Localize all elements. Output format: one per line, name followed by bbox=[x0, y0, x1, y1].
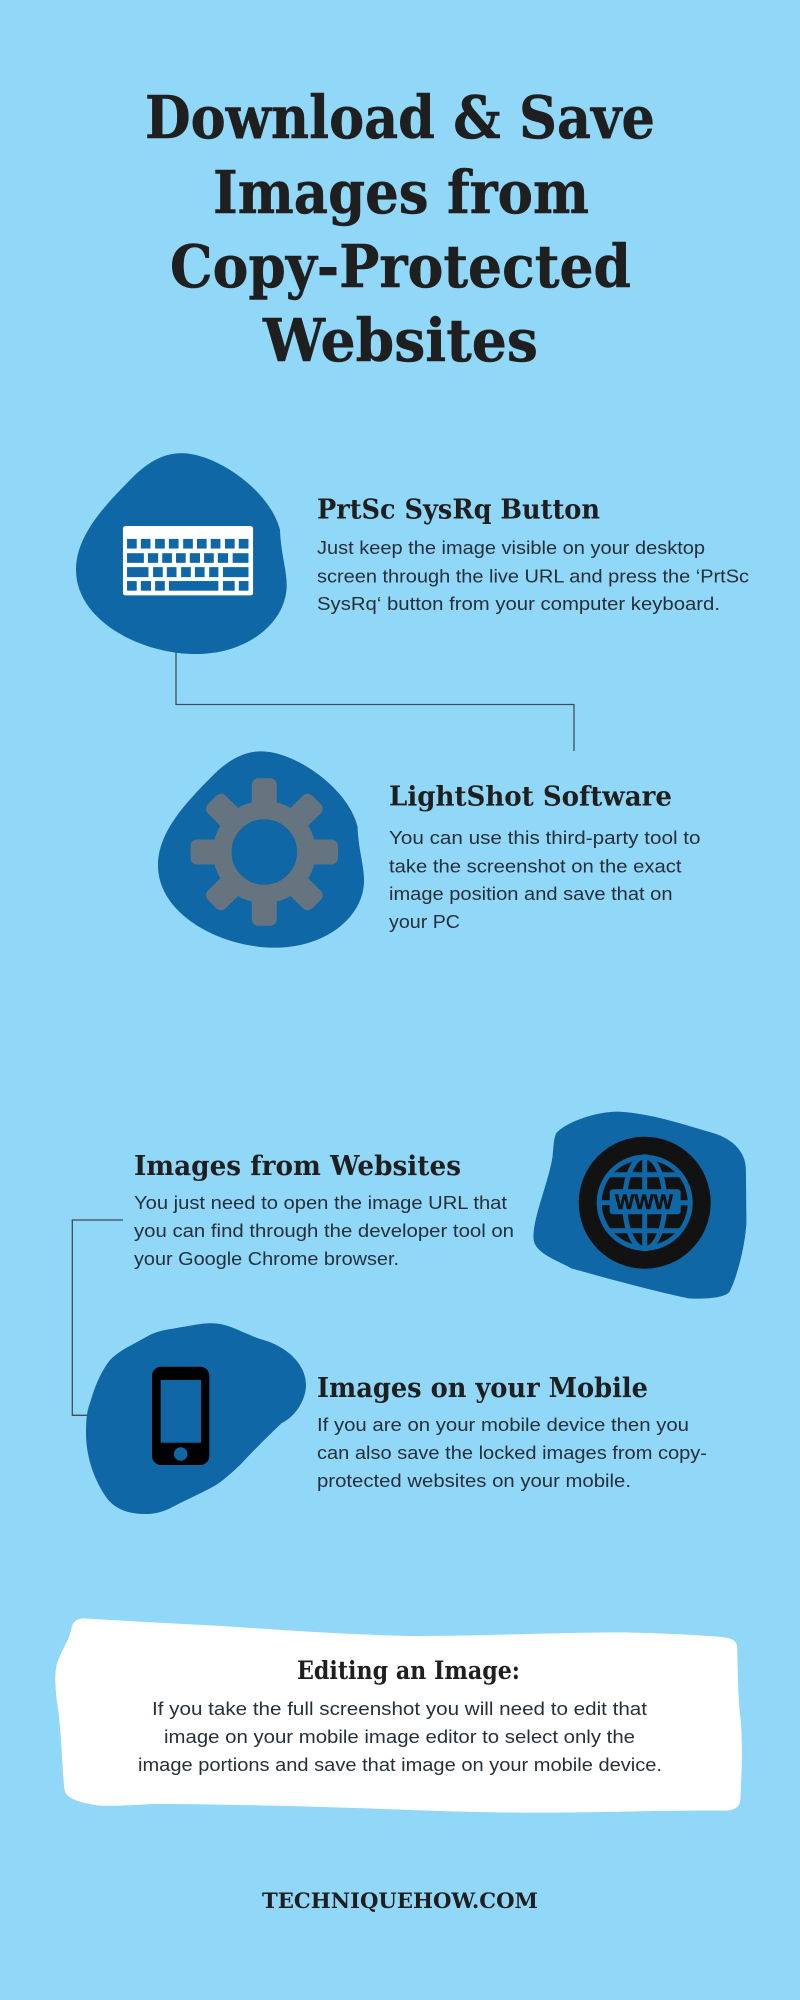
icon: www globe on blob bbox=[533, 1112, 746, 1299]
panel: Images on your Mobile bbox=[86, 1323, 707, 1514]
body text bbox=[138, 1698, 662, 1775]
heading: Editing an Image: bbox=[297, 1656, 520, 1685]
body text: your Google Chrome browser. bbox=[134, 1248, 399, 1269]
icon: gear on blob bbox=[158, 751, 364, 948]
body text: screen through the live URL and press the ‘PrtSc bbox=[317, 566, 749, 586]
heading: PrtSc SysRq Button bbox=[317, 494, 600, 526]
body text: take the screenshot on the exact bbox=[389, 856, 682, 876]
white card bbox=[55, 1618, 742, 1813]
body text: you can find through the developer tool on bbox=[134, 1220, 514, 1241]
body text bbox=[134, 1192, 514, 1269]
heading: Images from Websites bbox=[134, 1151, 461, 1182]
body text: can also save the locked images from copy- bbox=[317, 1442, 707, 1463]
body text: image position and save that on bbox=[389, 883, 672, 904]
body text bbox=[389, 827, 700, 932]
title: Websites bbox=[262, 306, 538, 375]
body text: You can use this third-party tool to bbox=[389, 827, 700, 848]
body text: If you take the full screenshot you will need to edit that bbox=[152, 1698, 647, 1719]
icon: www globe on blob: WWW bbox=[615, 1191, 673, 1214]
heading: LightShot Software bbox=[389, 782, 672, 812]
title bbox=[145, 83, 655, 375]
body text: your PC bbox=[389, 911, 460, 932]
body text bbox=[317, 537, 749, 614]
icon: keyboard on blob bbox=[76, 453, 287, 654]
body text: SysRq‘ button from your computer keyboard. bbox=[317, 593, 720, 614]
panel: LightShot Software bbox=[158, 751, 700, 948]
body text: You just need to open the image URL that bbox=[134, 1192, 507, 1213]
body text: protected websites on your mobile. bbox=[317, 1470, 631, 1491]
title: Download & Save bbox=[145, 83, 655, 152]
footer: website: TECHNIQUEHOW.COM bbox=[262, 1888, 538, 1913]
panel: PrtSc SysRq Button bbox=[76, 453, 749, 654]
body text: image portions and save that image on your mobile device. bbox=[138, 1754, 662, 1775]
connector: websites to mobile bbox=[72, 1220, 123, 1415]
heading: Images on your Mobile bbox=[317, 1373, 648, 1404]
body text: Just keep the image visible on your desktop bbox=[317, 537, 705, 558]
body text: If you are on your mobile device then you bbox=[317, 1414, 689, 1435]
panel: Editing an Image bbox=[55, 1618, 742, 1813]
icon: phone on blob bbox=[86, 1323, 306, 1514]
title: Images from bbox=[213, 158, 589, 227]
body text bbox=[317, 1414, 707, 1491]
panel: Images from Websites bbox=[134, 1112, 746, 1299]
connector: keyboard to gear bbox=[176, 652, 574, 751]
title: Copy-Protected bbox=[170, 232, 631, 301]
body text: image on your mobile image editor to select only the bbox=[164, 1726, 635, 1747]
